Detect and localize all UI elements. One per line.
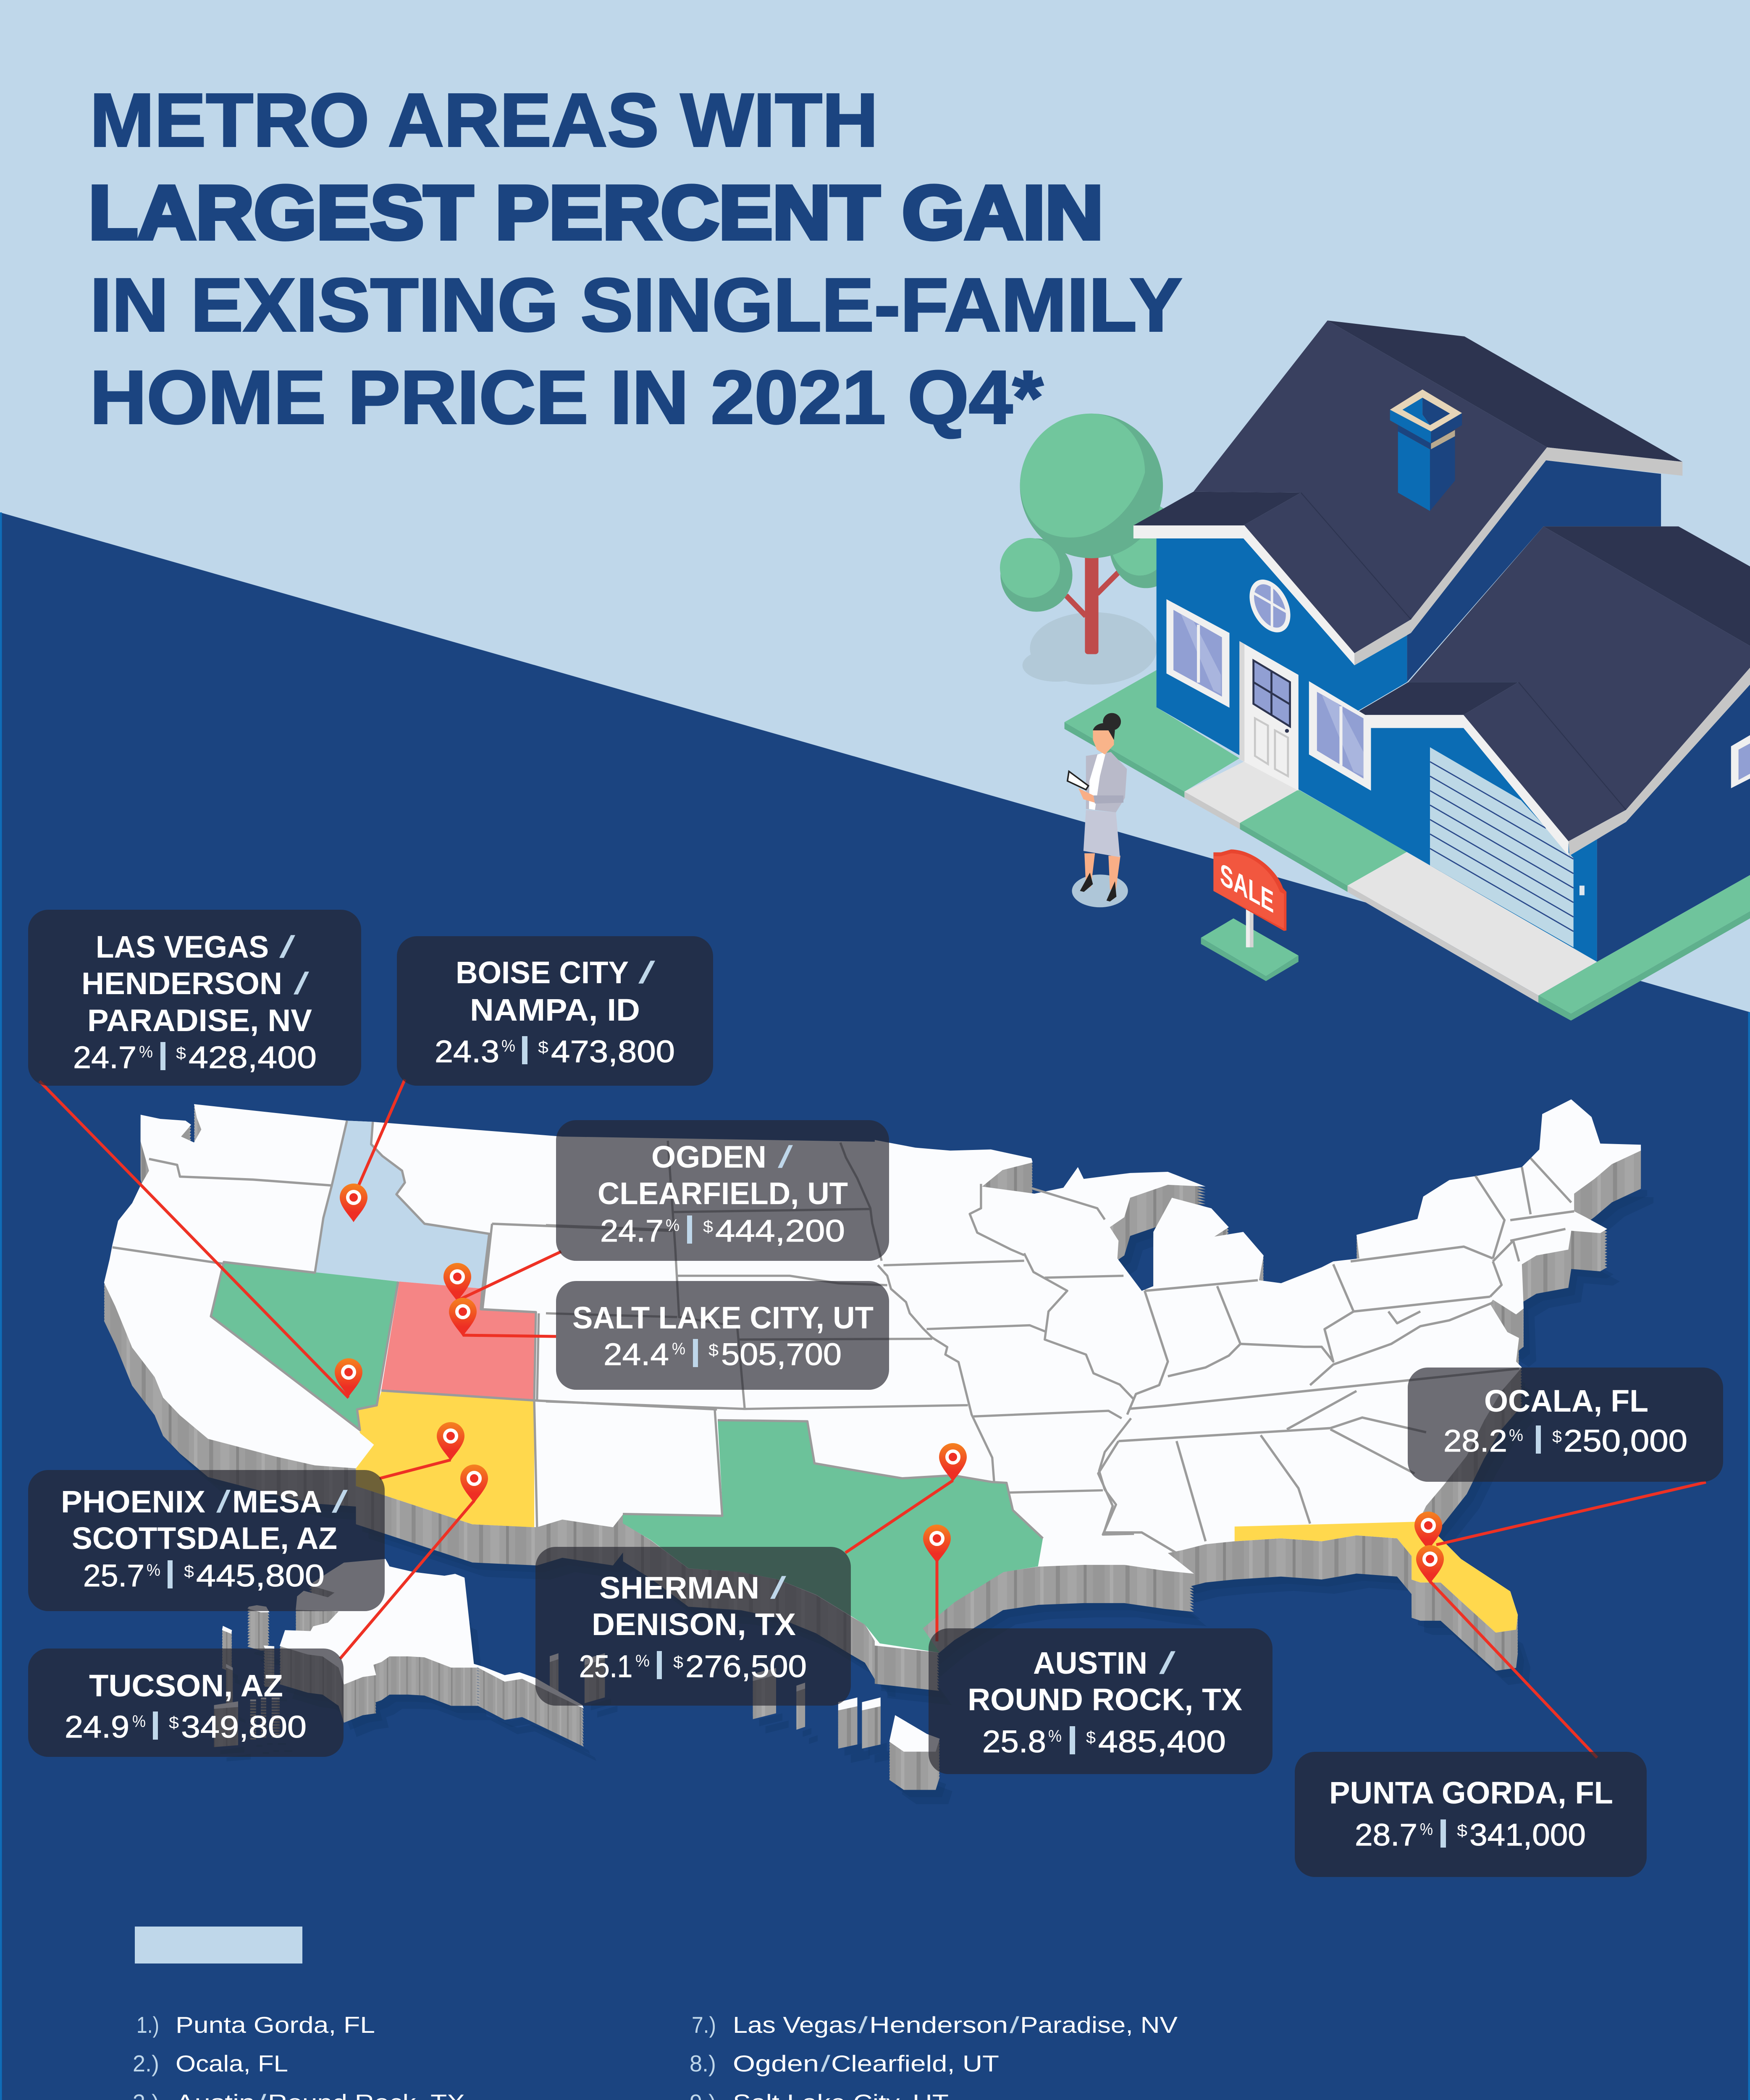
callout: Ocala: OCALA, FL — [1484, 1383, 1648, 1418]
callout: Phoenix: SCOTTSDALE, AZ — [72, 1521, 337, 1556]
pin: Austin — [923, 1525, 951, 1563]
callout: Phoenix: $ — [184, 1562, 194, 1581]
ranked list: right column: 7.) — [692, 2012, 716, 2038]
callout: Tucson — [28, 1648, 344, 1757]
callout: Punta Gorda — [1295, 1752, 1647, 1877]
map extrusion — [104, 1102, 1641, 1790]
callout: Ogden: / — [778, 1139, 793, 1174]
tree — [1000, 414, 1183, 685]
title: HOME PRICE IN 2021 Q4* — [90, 355, 1043, 440]
callout: Las Vegas: PARADISE, NV — [87, 1003, 312, 1038]
callout: Boise City: $ — [538, 1038, 548, 1057]
callout: Sherman: / — [770, 1570, 787, 1605]
sale sign — [1201, 849, 1299, 981]
callout: Sherman: DENISON, TX — [592, 1607, 796, 1642]
callout: Austin: AUSTIN — [1033, 1646, 1147, 1680]
main roof — [1133, 320, 1682, 665]
callout: Las Vegas: 428,400 — [189, 1040, 317, 1075]
front door — [1239, 641, 1299, 790]
callout: Austin: 485,400 — [1098, 1724, 1226, 1759]
front walls — [1157, 538, 1597, 962]
callout: Austin — [929, 1628, 1272, 1774]
callout: Las Vegas — [28, 910, 361, 1086]
callout: Sherman — [535, 1547, 851, 1706]
callout: Ogden — [556, 1120, 889, 1261]
right window — [1309, 681, 1371, 790]
callout: Phoenix: PHOENIX — [61, 1484, 205, 1519]
map top surface — [104, 1099, 1641, 1752]
garage door — [1430, 747, 1574, 948]
pin: Tucson — [460, 1465, 488, 1503]
round window — [1241, 573, 1299, 639]
state: Utah — [381, 1281, 536, 1401]
ranked list: right column: Paradise, NV — [1020, 2012, 1178, 2038]
state: Arizona — [356, 1392, 534, 1527]
callout: Sherman: SHERMAN — [599, 1570, 759, 1605]
upper walls — [1407, 460, 1661, 682]
callout: Tucson: $ — [169, 1714, 179, 1732]
callout: Salt Lake City — [556, 1281, 889, 1390]
callout: Tucson: TUCSON, AZ — [89, 1668, 283, 1703]
ranked list: right column: Ogden — [733, 2050, 819, 2076]
callout: Sherman: 25.1 — [579, 1649, 632, 1684]
callout: Boise City: 24.3 — [435, 1034, 499, 1069]
callout: Austin: $ — [1086, 1728, 1096, 1747]
ranked list: right column: / — [821, 2050, 831, 2076]
callout: Phoenix — [28, 1470, 385, 1611]
central state lines — [546, 1141, 1134, 1538]
callout: Ogden: 24.7 — [600, 1213, 664, 1248]
callout: Ocala: 250,000 — [1564, 1423, 1687, 1458]
map of the United States — [104, 1099, 1653, 1804]
woman — [1068, 713, 1128, 907]
left window — [1166, 599, 1229, 708]
callout: Las Vegas: LAS VEGAS — [96, 929, 269, 964]
pin: Phoenix — [437, 1422, 464, 1461]
callout: Phoenix: / — [332, 1484, 348, 1519]
ranked list: left column: Punta Gorda, FL — [176, 2012, 375, 2038]
callout: Ocala: % — [1509, 1426, 1523, 1445]
garage roof — [1352, 526, 1750, 841]
callout: Las Vegas: / — [294, 966, 310, 1001]
right wall — [1597, 685, 1750, 962]
callout: Boise City: / — [638, 955, 656, 990]
pin: Ogden — [443, 1263, 471, 1302]
map shadow — [110, 1144, 1653, 1804]
callout: Ogden: % — [666, 1216, 680, 1235]
state: Texas — [623, 1420, 1043, 1653]
callout: Phoenix: % — [147, 1561, 160, 1580]
east state lines — [1098, 1158, 1574, 1553]
lawn and walkway — [1065, 670, 1750, 1021]
title: IN EXISTING SINGLE-FAMILY — [90, 263, 1182, 347]
callout: Austin: % — [1048, 1727, 1062, 1746]
background: dark blue diagonal panel — [0, 512, 1750, 2100]
callout: Phoenix: 25.7 — [83, 1558, 144, 1593]
ranked list: left column — [131, 2012, 545, 2100]
garage roof trim — [1352, 668, 1750, 895]
ranked list: left column: 1.) — [136, 2012, 159, 2038]
side window — [1731, 735, 1750, 788]
callout: Phoenix: 445,800 — [196, 1558, 325, 1593]
callout: Las Vegas: $ — [176, 1044, 186, 1063]
callout: Boise City: BOISE CITY — [456, 955, 629, 990]
ranked list: right column: / — [858, 2012, 868, 2038]
callout: Salt Lake City: $ — [708, 1341, 719, 1360]
state: Nevada — [211, 1262, 398, 1430]
ranked list: right column: 8.) — [690, 2050, 716, 2076]
callout: Salt Lake City: 505,700 — [721, 1337, 842, 1372]
callout: Ogden: CLEARFIELD, UT — [598, 1176, 848, 1211]
ranked list: left column: 2.) — [133, 2050, 159, 2076]
callout: Ogden: $ — [703, 1218, 713, 1236]
ranked list: left column: Ocala, FL — [176, 2050, 288, 2076]
callout: Boise City — [397, 936, 713, 1086]
callout: Austin: / — [1159, 1646, 1176, 1680]
pin: Boise — [340, 1184, 367, 1222]
legend heading bar — [135, 1927, 302, 1964]
ranked list: right column: / — [1010, 2012, 1020, 2038]
callout: Ocala: $ — [1552, 1428, 1562, 1446]
pin: Sherman — [939, 1443, 967, 1482]
callout: Sherman: % — [635, 1652, 650, 1670]
callout: Boise City: % — [501, 1037, 515, 1055]
callout: Las Vegas: / — [279, 929, 296, 964]
callout: Punta Gorda: PUNTA GORDA, FL — [1329, 1775, 1613, 1810]
pin: Las Vegas — [335, 1358, 362, 1397]
state: Florida — [1235, 1518, 1518, 1633]
callout: Tucson: 24.9 — [65, 1709, 129, 1744]
west state lines — [113, 1121, 717, 1527]
callout: Ogden: 444,200 — [715, 1213, 845, 1248]
callout: Ocala: 28.2 — [1443, 1423, 1507, 1458]
callout lines — [39, 1079, 1706, 1758]
callout: Las Vegas: % — [139, 1043, 153, 1061]
callout: Punta Gorda: % — [1420, 1820, 1433, 1839]
ranked list: right column: Clearfield, UT — [831, 2050, 999, 2076]
callout: Ocala — [1408, 1368, 1723, 1482]
callout: Tucson: 349,800 — [181, 1709, 307, 1744]
callout: Las Vegas: HENDERSON — [81, 966, 282, 1001]
callout: Salt Lake City: SALT LAKE CITY, UT — [572, 1300, 874, 1335]
callout: Tucson: % — [132, 1712, 146, 1731]
callout: Punta Gorda: 28.7 — [1355, 1817, 1417, 1852]
callout: Las Vegas: 24.7 — [73, 1040, 136, 1075]
pin: Punta Gorda — [1416, 1545, 1444, 1584]
state: Idaho — [315, 1121, 489, 1289]
callout: Austin: ROUND ROCK, TX — [968, 1682, 1242, 1717]
ranked list: right column — [679, 2012, 1178, 2100]
ranked list: right column: Henderson — [869, 2012, 1008, 2038]
title: LARGEST PERCENT GAIN — [89, 171, 1103, 255]
chimney — [1390, 389, 1462, 511]
title — [89, 78, 1182, 440]
callout: Austin: 25.8 — [982, 1724, 1046, 1759]
callout: Sherman: $ — [673, 1653, 683, 1672]
callout: Ogden: OGDEN — [651, 1139, 766, 1174]
callout: Boise City: NAMPA, ID — [470, 992, 640, 1027]
callout: Salt Lake City: % — [672, 1340, 685, 1358]
callout: Boise City: 473,800 — [551, 1034, 675, 1069]
callout: Punta Gorda: $ — [1457, 1822, 1467, 1840]
page border — [1, 512, 1749, 2100]
callout: Punta Gorda: 341,000 — [1469, 1817, 1586, 1852]
ranked list: right column: Las Vegas — [733, 2012, 857, 2038]
callout: Salt Lake City: 24.4 — [603, 1337, 669, 1372]
callout: Phoenix: / — [216, 1484, 231, 1519]
house illustration — [1000, 320, 1750, 1021]
callout: Sherman: 276,500 — [685, 1649, 807, 1684]
callout: Phoenix: MESA — [232, 1484, 322, 1519]
title: METRO AREAS WITH — [90, 78, 878, 163]
sale sign: SALE — [1220, 856, 1274, 920]
pin: Salt Lake City — [449, 1298, 477, 1336]
pin: Ocala — [1414, 1512, 1442, 1550]
